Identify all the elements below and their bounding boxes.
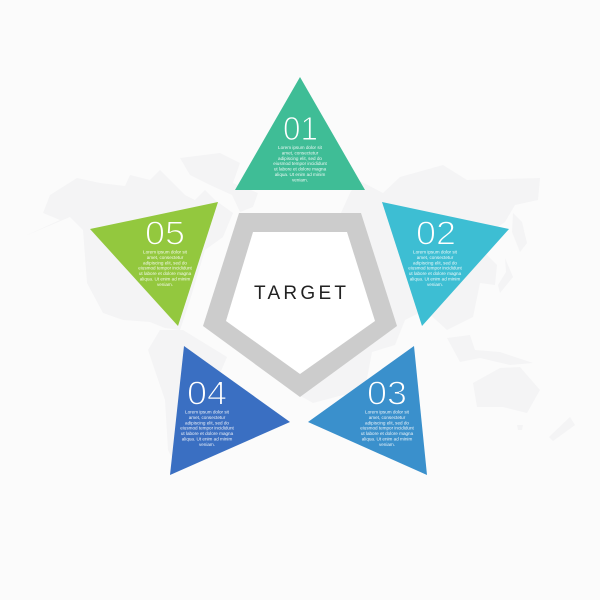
text block 03: veniam. (379, 442, 395, 447)
text block 05: adipiscing elit, sed do (143, 260, 187, 265)
text block 04: aliqua. Ut enim ad minim (182, 436, 232, 442)
text block 02: ut labore et dolore magna (409, 271, 462, 276)
text block 01: veniam. (292, 177, 308, 182)
text block 03: aliqua. Ut enim ad minim (362, 436, 412, 442)
number 01: 01 (283, 110, 318, 147)
text block 04: adipiscing elit, sed do (185, 420, 229, 425)
text block 03: amet, consectetur (369, 415, 406, 420)
text block 01: Lorem ipsum dolor sit (278, 145, 323, 150)
text block 02: Lorem ipsum dolor sit (413, 250, 458, 254)
text block 05: amet, consectetur (147, 255, 184, 260)
text block 02: eiusmod tempor incididunt (408, 266, 463, 271)
text block 05: Lorem ipsum dolor sit (143, 250, 188, 254)
text block 03: adipiscing elit, sed do (365, 420, 409, 425)
text block 04: amet, consectetur (189, 415, 226, 420)
text block 02: veniam. (427, 282, 443, 287)
text block 05: ut labore et dolore magna (139, 271, 192, 276)
text block 04: eiusmod tempor incididunt (180, 426, 235, 431)
text block 04: ut labore et dolore magna (181, 431, 234, 436)
text block 03: ut labore et dolore magna (361, 431, 414, 436)
text block 04: veniam. (199, 442, 215, 447)
text block 01: eiusmod tempor incididunt (273, 161, 328, 166)
number 04: 04 (187, 374, 227, 412)
text block 05: veniam. (157, 282, 173, 287)
text block 05: aliqua. Ut enim ad minim (140, 276, 190, 282)
text block 03: Lorem ipsum dolor sit (365, 410, 410, 414)
panel: triangle 01 (235, 77, 365, 190)
panel: triangle 02 (382, 202, 509, 326)
text block 01: ut labore et dolore magna (274, 167, 327, 172)
text block 02: adipiscing elit, sed do (413, 260, 457, 265)
number 02: 02 (416, 214, 456, 252)
panel: triangle 03 (308, 346, 427, 475)
panel: triangle 05 (90, 202, 218, 326)
text block 02: amet, consectetur (417, 255, 454, 260)
text block 02: aliqua. Ut enim ad minim (410, 276, 460, 282)
world map background (25, 153, 575, 470)
text block 01: adipiscing elit, sed do (278, 156, 322, 161)
number 03: 03 (367, 374, 407, 412)
text block 05: eiusmod tempor incididunt (138, 266, 193, 271)
text block 04: Lorem ipsum dolor sit (185, 410, 230, 414)
text block 01: aliqua. Ut enim ad minim (275, 172, 325, 177)
text block 03: eiusmod tempor incididunt (360, 426, 415, 431)
panel: triangle 04 (170, 346, 290, 475)
number 05: 05 (145, 214, 185, 252)
panel: central target pentagon (203, 213, 397, 397)
heading: target: TARGET (254, 283, 346, 304)
text block 01: amet, consectetur (282, 150, 319, 155)
